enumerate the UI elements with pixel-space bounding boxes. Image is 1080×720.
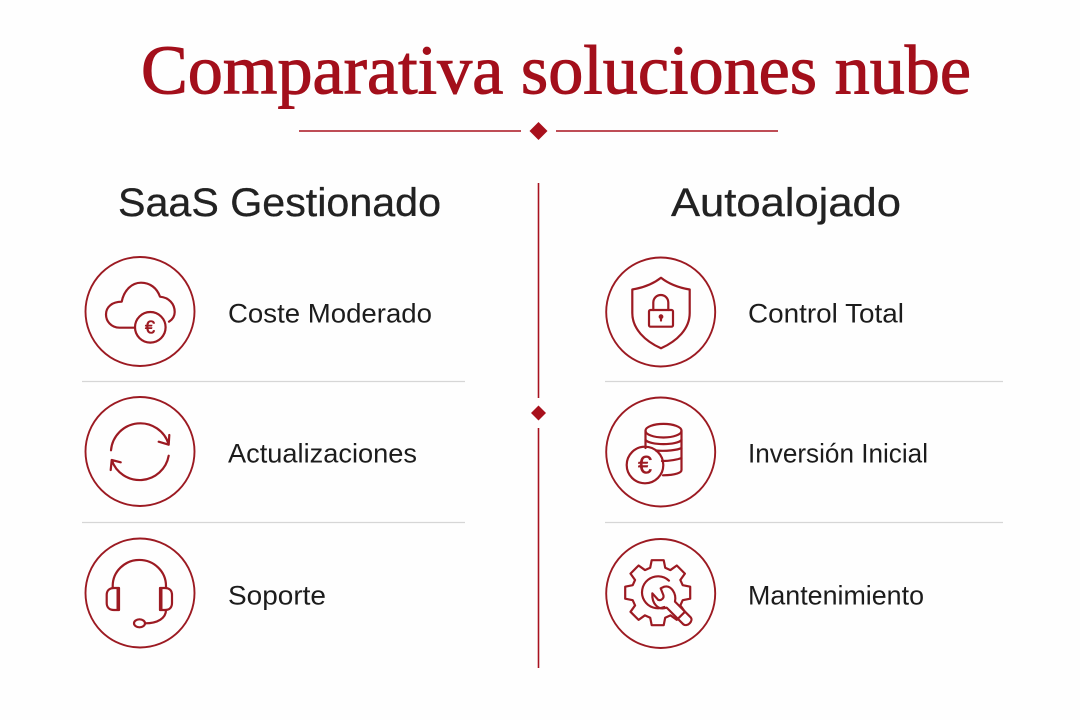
title ornament [299, 122, 778, 140]
icon: gear with wrench [606, 539, 715, 648]
label: Soporte: Soporte [228, 580, 326, 610]
icon: coin stack with euro: € [638, 452, 652, 480]
icon: refresh arrows [86, 397, 194, 506]
title: Comparativa soluciones nube [141, 32, 971, 110]
label: Control Total: Control Total [748, 298, 904, 328]
heading: SaaS Gestionado: SaaS Gestionado [118, 181, 441, 225]
label: Mantenimiento: Mantenimiento [748, 580, 924, 610]
panel: Autoalojado [606, 181, 928, 648]
heading: Autoalojado: Autoalojado [671, 181, 901, 225]
icon: cloud with euro coin: € [145, 318, 155, 338]
central divider [531, 183, 546, 668]
icon: headset [86, 538, 194, 648]
icon: shield with padlock [606, 258, 715, 366]
panel: SaaS Gestionado [86, 181, 441, 648]
icon: cloud with euro coin [86, 257, 194, 366]
label: Coste Moderado: Coste Moderado [228, 298, 432, 328]
label: Inversión Inicial: Inversión Inicial [748, 438, 928, 468]
label: Actualizaciones: Actualizaciones [228, 438, 417, 468]
icon: coin stack with euro [606, 398, 715, 506]
